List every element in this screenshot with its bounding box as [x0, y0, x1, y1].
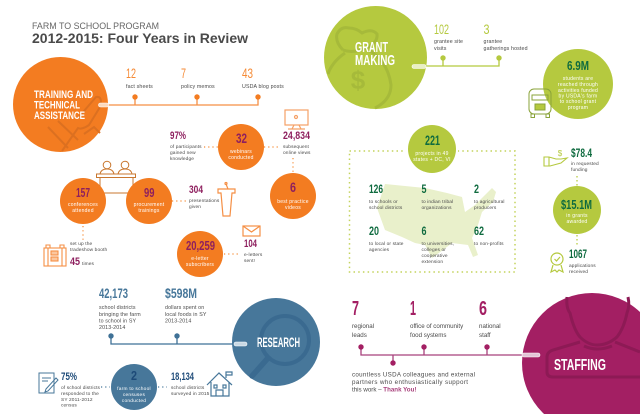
circle: censuses: [111, 364, 157, 410]
stat: presentations: 304: [189, 184, 204, 196]
stat: office of community food systems: office of community: [410, 323, 464, 330]
stat: tradeshow booth: tradeshow booth: [70, 247, 107, 253]
circle: censuses: censuses: [123, 393, 145, 398]
stat: tribal: organizations: [422, 205, 452, 211]
circle: e-letter subscribers: 20,259: [186, 239, 215, 253]
heading circle: grant making: GRANT: [355, 39, 388, 56]
circle: conferences attended: attended: [72, 208, 94, 214]
circle: procurement trainings: trainings: [138, 208, 160, 214]
stat: 97 percent: gained new: [170, 150, 196, 156]
timeline: grant: gatherings hosted: [484, 46, 528, 52]
timeline: training outputs: 43: [242, 66, 253, 81]
stat: school districts: [99, 286, 141, 331]
circle: students reached: reached through: [558, 82, 598, 88]
stat: dollars spent: dollars spent on: [165, 305, 204, 311]
stat: online views: 24,834: [283, 130, 311, 142]
circle: students reached: to school grant: [560, 99, 597, 105]
stat: applications: received: [569, 269, 588, 275]
stat: agencies: to local or state: [369, 241, 404, 247]
stat: agencies: [369, 224, 404, 253]
icon: conference table: [96, 161, 136, 193]
icon: notepad: [39, 373, 58, 393]
circle: censuses: conducted: [122, 398, 146, 404]
circle: students reached: program: [568, 105, 588, 111]
circle: grants awarded: in grants: [566, 213, 588, 219]
stat: universities: cooperative: [422, 253, 448, 259]
timeline: training outputs: [98, 66, 284, 107]
stat: national staff: [479, 298, 501, 339]
timeline: training outputs: 7: [181, 66, 186, 81]
heading circle: grant making: MAKING: [355, 52, 395, 69]
stat: producers: producers: [474, 205, 497, 211]
heading circle: training: TECHNICAL: [34, 100, 80, 112]
circle: e-letter subscribers: e-letter: [191, 256, 209, 262]
panel: grant making: [324, 6, 613, 275]
stat: online views: subsequent: [283, 144, 310, 150]
stat: 97 percent: 97%: [170, 130, 186, 142]
circle: students reached: students are: [563, 76, 593, 82]
icon: envelope: [243, 226, 260, 236]
stat: applications: 1067: [569, 249, 587, 261]
stat: tribal: 5: [422, 182, 427, 196]
stat: dollars spent: 2013-2014: [165, 318, 191, 324]
circle: best practice videos: [270, 173, 316, 219]
circle: students reached: by USDA's farm: [559, 94, 597, 100]
stat: requested funding: [571, 148, 599, 173]
connectors: research dots: [101, 386, 167, 388]
circle: e-letter subscribers: subscribers: [186, 262, 214, 268]
heading circle: training: ASSISTANCE: [34, 110, 85, 122]
timeline: research: [108, 333, 247, 346]
heading circle: grant making: [324, 6, 427, 109]
map of the United States: [377, 184, 496, 258]
heading circle: staffing: STAFFING: [554, 357, 606, 374]
icon: school bus: [529, 89, 551, 118]
timeline: training outputs: policy memos: [181, 84, 215, 90]
stat: 97 percent: of participants: [170, 144, 202, 150]
stat: tribal: to indian tribal: [422, 199, 453, 205]
stat: office of community food systems: food systems: [410, 332, 446, 339]
stat: regional leads: [352, 298, 374, 339]
stat: 75 percent: responded to the: [61, 391, 99, 397]
circle: best practice videos: videos: [285, 205, 301, 211]
circle: grants awarded: [553, 186, 601, 234]
stat: producers: 2: [474, 182, 479, 196]
circle: procurement trainings: 99: [144, 185, 154, 200]
stat: e-letters sent: e-letters: [244, 252, 263, 258]
stat: school districts: bringing the farm: [99, 312, 141, 318]
heading circle: grant making: $: [351, 65, 366, 95]
stat: dollars spent: [165, 286, 207, 324]
timeline: training outputs: 12: [126, 66, 136, 81]
dotted frame: [350, 151, 515, 272]
timeline: training outputs: fact sheets: [126, 84, 153, 90]
icon: award ribbon: [551, 253, 563, 272]
heading circle: training: [13, 57, 108, 152]
heading circle: research: [232, 298, 320, 386]
circle: students reached: activities funded: [558, 88, 598, 94]
title: FARM TO SCHOOL PROGRAM: [32, 21, 159, 32]
circle: webinars: 32: [236, 131, 247, 146]
stat: e-letters sent: [244, 238, 263, 264]
panel: training and technical assistance: [13, 57, 316, 277]
title: 2012-2015: Four Years in Review: [32, 30, 248, 46]
stat: schools: to schools or: [369, 199, 398, 205]
circle: projects: 221: [425, 132, 440, 148]
stat: 97 percent: knowledge: [170, 156, 194, 162]
timeline: grant: [412, 21, 528, 68]
stat: 75 percent: SY 2011-2012: [61, 397, 93, 403]
heading circle: training: TRAINING AND: [34, 89, 93, 101]
circle: projects: projects in 49: [415, 151, 449, 157]
stat: 75 percent: 75%: [61, 371, 77, 383]
heading circle: research: RESEARCH: [257, 335, 300, 350]
stat: non-profits: [474, 224, 504, 247]
stat: regional leads: 7: [352, 298, 359, 320]
icon: hand with dollar: $: [558, 149, 563, 158]
circle: projects: states + DC, VI: [413, 157, 451, 163]
stat: dollars spent: $598M: [165, 286, 197, 301]
timeline: grant: grantee site: [434, 39, 463, 45]
timeline: grant: grantee: [484, 39, 502, 45]
stat: universities: to universities,: [422, 241, 454, 247]
stat: universities: [422, 224, 454, 265]
circle: webinars: webinars: [230, 149, 252, 155]
stat: school districts: 2013-2014: [99, 325, 125, 331]
timeline: staffing: [358, 344, 540, 366]
circle: procurement trainings: procurement: [134, 202, 165, 208]
stat: universities: colleges or: [422, 247, 446, 253]
stat: school districts: school districts: [99, 305, 136, 311]
circle: grants awarded: awarded: [567, 219, 587, 225]
circle: students reached: 6.9M: [567, 58, 589, 73]
icon: house: [207, 372, 232, 396]
circle: best practice videos: best practice: [277, 199, 309, 205]
stat: requested funding: $78.4: [571, 148, 592, 160]
stat: tradeshow booth: 45: [70, 256, 80, 268]
panel: research: [39, 286, 320, 410]
stat: universities: 6: [422, 224, 427, 238]
circle: procurement trainings: [126, 178, 172, 224]
stat: producers: [474, 182, 505, 211]
stat: schools: 126: [369, 182, 383, 196]
stat: surveyed: [171, 371, 210, 397]
circle: projects: [408, 125, 456, 173]
stat: national staff: 6: [479, 298, 487, 320]
stat: surveyed: 18,134: [171, 371, 195, 383]
stat: dollars spent: local foods in SY: [165, 312, 207, 318]
stat: tradeshow booth: [70, 241, 107, 268]
stat: presentations: presentations: [189, 198, 220, 204]
stat: national staff: national: [479, 323, 501, 330]
timeline: training outputs: USDA blog posts: [242, 84, 284, 90]
circle: e-letter subscribers: [177, 231, 223, 277]
stat: applications: [569, 249, 596, 275]
stat: regional leads: leads: [352, 332, 367, 339]
circle: censuses: farm to school: [117, 386, 151, 392]
stat: requested funding: in requested: [571, 161, 599, 167]
stat: national staff: staff: [479, 332, 491, 339]
stat: e-letters sent: 104: [244, 238, 258, 250]
stat: presentations: given: [189, 204, 201, 210]
stat: tradeshow booth: times: [82, 261, 95, 267]
circle: webinars: [218, 124, 264, 170]
panel: staffing: [352, 293, 640, 414]
stat: regional leads: regional: [352, 323, 374, 330]
stat: presentations: [189, 184, 220, 210]
text: thanks: this work – Thank You!: [352, 386, 416, 394]
circle: conferences attended: 157: [76, 185, 90, 200]
stat: agencies: agencies: [369, 247, 390, 253]
circle: students reached: [543, 49, 613, 119]
stat: online views: [283, 130, 311, 156]
heading circle: staffing: [522, 293, 640, 414]
stat: 75 percent: [61, 371, 101, 408]
stat: 97 percent: [170, 130, 202, 162]
stat: non-profits: to non-profits: [474, 241, 504, 247]
circle: grants awarded: $15.1M: [561, 198, 592, 212]
stat: school districts: 42,173: [99, 286, 128, 301]
text: thanks: countless USDA colleagues and external: [352, 372, 475, 378]
stat: office of community food systems: [410, 298, 464, 339]
stat: e-letters sent: sent!: [244, 258, 255, 264]
icon: hand with dollar: [544, 149, 567, 166]
stat: tribal: [422, 182, 453, 211]
stat: schools: [369, 182, 403, 211]
timeline: grant: 102: [434, 21, 449, 37]
stat: applications: applications: [569, 263, 596, 269]
timeline: grant: 3: [484, 21, 490, 37]
connectors: funding dots: [576, 176, 578, 245]
circle: conferences attended: [60, 178, 106, 224]
stat: tradeshow booth: set up the: [70, 241, 92, 247]
stat: online views: online views: [283, 150, 311, 156]
text: thanks: [352, 372, 475, 394]
stat: 75 percent: census: [61, 404, 77, 408]
stat: producers: to agricultural: [474, 199, 505, 205]
circle: webinars: conducted: [228, 155, 254, 161]
icon: monitor: [285, 110, 308, 129]
circle: conferences attended: conferences: [68, 202, 98, 208]
map panel: projects: [350, 125, 515, 272]
timeline: grant: visits: [434, 46, 447, 52]
stat: schools: school districts: [369, 205, 403, 211]
circle: best practice videos: 6: [290, 180, 296, 195]
icon: tradeshow booth: [44, 245, 66, 266]
stat: universities: extension: [422, 259, 443, 265]
circle: censuses: 2: [131, 368, 137, 383]
stat: surveyed: school districts: [171, 385, 205, 391]
white cover of the frame behind circle: [405, 145, 458, 157]
icon: podium: [218, 182, 235, 216]
stat: 75 percent: of school districts: [61, 385, 101, 391]
stat: office of community food systems: 1: [410, 298, 416, 320]
stat: non-profits: 62: [474, 224, 484, 238]
title: [32, 21, 248, 46]
text: thanks: partners who enthusiastically support: [352, 379, 468, 386]
stat: surveyed: surveyed in 2015: [171, 391, 210, 397]
stat: school districts: to school in SY: [99, 318, 136, 324]
stat: agencies: 20: [369, 224, 379, 238]
connectors: training dots: [83, 147, 293, 254]
stat: requested funding: funding: [571, 167, 588, 173]
